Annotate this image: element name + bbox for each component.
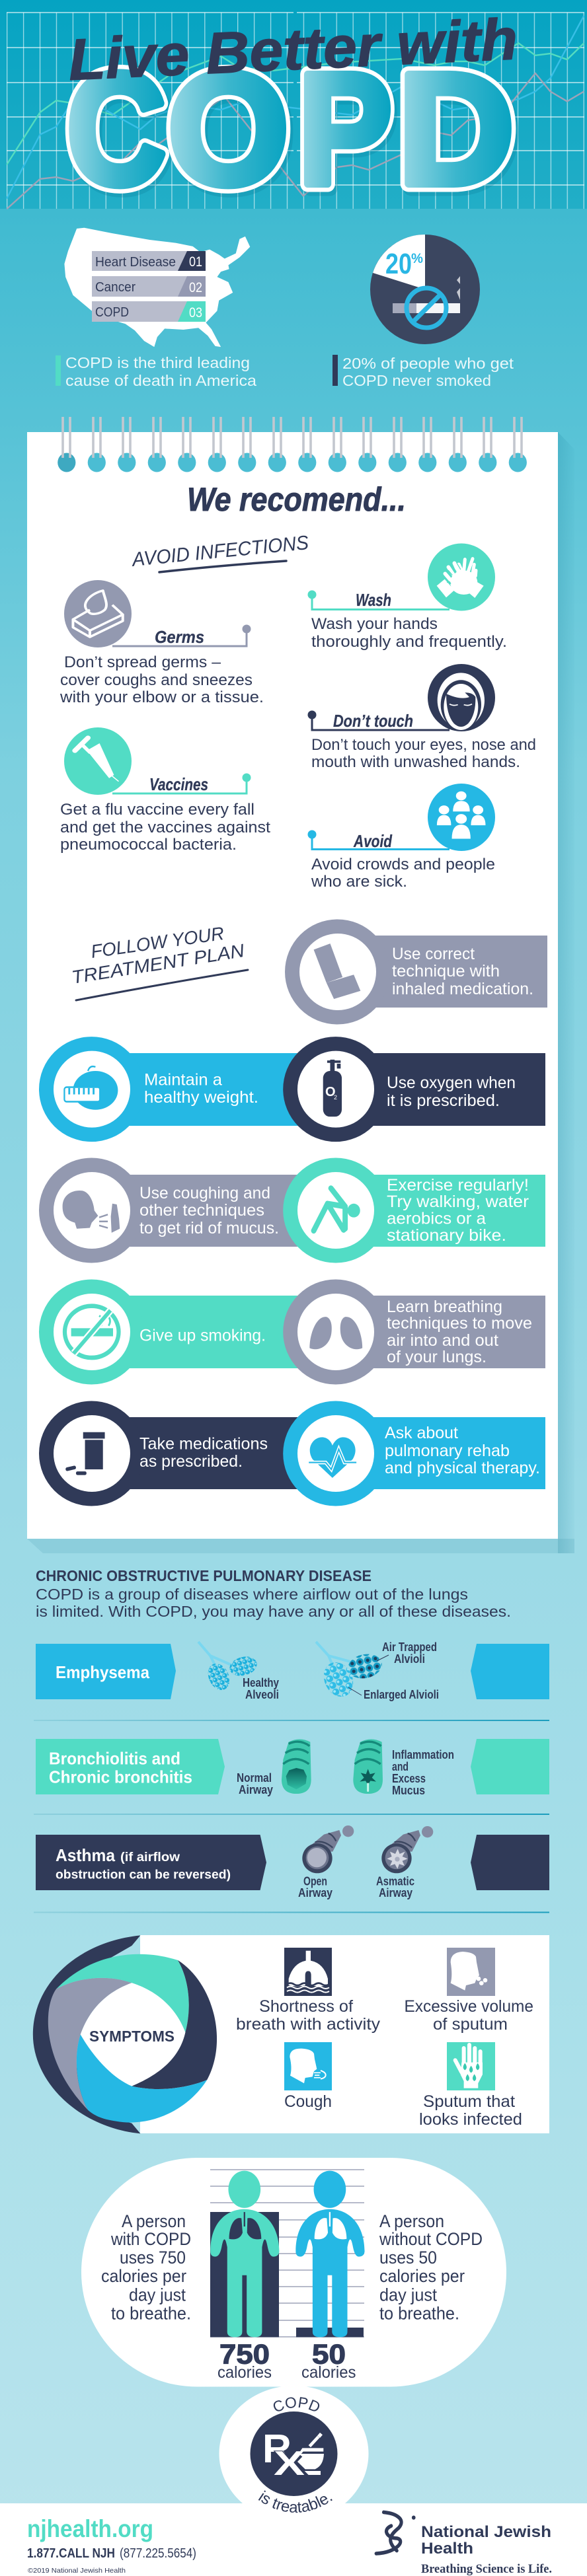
symptom: excessive sputum	[405, 1948, 533, 2034]
text: with COPD: day just	[129, 2285, 186, 2304]
value labels: calories	[301, 2363, 356, 2382]
icon: hands	[437, 559, 484, 598]
pill: coughing techniques	[39, 1158, 336, 1263]
icon: inhaler	[314, 943, 360, 999]
title: Live Better with: Live Better with	[67, 6, 519, 92]
panel: germs: cover coughs and sneezes	[60, 671, 253, 689]
symptom: shortness of breath: breath with activity	[236, 2015, 381, 2034]
footer contact	[27, 2515, 196, 2575]
pill: oxygen: it is prescribed.	[387, 1091, 500, 1110]
map panel: leading causes of death	[64, 228, 250, 347]
big COPD title: D	[398, 40, 514, 217]
panel: wash: Wash your hands	[311, 615, 438, 633]
caption: never smoked	[333, 355, 514, 389]
illustration: asthmatic airway: Asmatic	[376, 1874, 414, 1888]
pill: oxygen	[283, 1037, 545, 1142]
section intro: chronic obstructive pulmonary disease	[36, 1567, 511, 1620]
icon: helix	[376, 2512, 416, 2554]
pill: breathing techniques: techniques to move	[387, 1314, 532, 1333]
pill: pulmonary rehab: pulmonary rehab	[385, 1442, 510, 1460]
illustration: healthy alveoli	[198, 1642, 280, 1701]
symptom: excessive sputum: of sputum	[433, 2015, 508, 2034]
pill: pulmonary rehab: Ask about	[385, 1424, 458, 1442]
big COPD title: D	[398, 40, 514, 217]
caption: never smoked: COPD never smoked	[342, 372, 491, 389]
big COPD title	[67, 40, 517, 221]
figure: person without COPD	[295, 2171, 365, 2337]
pill: oxygen: O	[325, 1085, 336, 1099]
text: without COPD: calories per	[379, 2266, 465, 2286]
pill: exercise: aerobics or a	[387, 1209, 486, 1228]
text: with COPD: to breathe.	[111, 2304, 191, 2324]
big COPD title: C	[69, 44, 169, 221]
band: emphysema: Emphysema	[56, 1662, 149, 1682]
icon: coughing head	[63, 1191, 120, 1233]
icon: coughing head	[290, 2049, 326, 2083]
big COPD title: O	[171, 44, 292, 221]
symptom: infected sputum	[419, 2042, 522, 2129]
panel: notebook page	[27, 432, 558, 1539]
heading: We recomend: We recomend...	[187, 481, 406, 518]
icon: lungs and water	[287, 1951, 329, 1993]
rank 02 cancer: Cancer	[95, 280, 136, 295]
panel: don't touch: Don’t touch your eyes, nose and	[311, 736, 536, 754]
value labels: calories	[217, 2363, 272, 2382]
panel: symptoms band	[140, 1935, 549, 2133]
panel: wash: Wash	[356, 590, 391, 610]
badge: COPD is treatable: COPD	[274, 2397, 320, 2411]
footer contact: (877.225.5654)	[120, 2546, 196, 2561]
symptom: shortness of breath	[236, 1948, 381, 2034]
pill: exercise: Exercise regularly!	[387, 1176, 529, 1195]
value labels: 50	[312, 2339, 346, 2369]
icon: exercising figure	[314, 1189, 360, 1231]
logo: National Jewish Health: Health	[421, 2540, 473, 2558]
big COPD title: P	[301, 44, 395, 221]
pill: pulmonary rehab: and physical therapy.	[385, 1459, 540, 1477]
text: with COPD: uses 750	[120, 2248, 186, 2267]
logo: National Jewish Health: Breathing Science is Life.	[421, 2562, 552, 2576]
pill: oxygen: 2	[334, 1094, 337, 1101]
band: bronchitis: Bronchiolitis and	[49, 1749, 180, 1769]
icon: people	[437, 791, 485, 838]
pill: exercise: Try walking, water	[387, 1193, 529, 1211]
pill: healthy weight: healthy weight.	[144, 1088, 258, 1107]
text: without COPD: A person	[379, 2211, 444, 2231]
chart background: grid and trend lines	[7, 13, 584, 209]
illustration: open airway: Airway	[298, 1886, 333, 1899]
pill: healthy weight	[39, 1037, 336, 1142]
panel: vaccines: pneumococcal bacteria.	[60, 836, 237, 854]
pie chart: 20 percent never smoked: %	[411, 251, 423, 266]
footer contact: 1.877.CALL NJH	[27, 2546, 115, 2561]
text: with COPD: A person	[122, 2211, 186, 2231]
symptom: cough: Cough	[284, 2092, 332, 2111]
illustration: inflamed airway: Excess	[392, 1771, 426, 1785]
pill: inhaled medication: inhaled medication.	[392, 980, 533, 998]
value labels	[217, 2339, 356, 2382]
band: emphysema	[36, 1640, 549, 1701]
icon: lungs	[309, 1317, 362, 1349]
rank 01 heart disease: Heart Disease	[95, 255, 176, 270]
illustration: healthy alveoli: Alveoli	[245, 1687, 279, 1701]
big COPD title: P	[298, 40, 392, 217]
illustration: normal airway	[237, 1739, 311, 1796]
panel: avoid crowds	[308, 784, 495, 891]
icon: no smoking	[393, 276, 460, 328]
icon: Rx with mortar: X	[274, 2445, 305, 2483]
icon: syringe	[75, 738, 118, 781]
text: without COPD: uses 50	[379, 2248, 437, 2267]
illustration: inflamed airway: Mucus	[392, 1783, 425, 1797]
value labels: 750	[219, 2339, 270, 2369]
pill: breathing techniques: of your lungs.	[387, 1348, 487, 1366]
symptoms swirl: SYMPTOMS	[89, 2028, 175, 2045]
text: without COPD: day just	[379, 2285, 437, 2304]
panel: germs: Germs	[155, 627, 204, 647]
icon: hand with drops	[455, 2045, 483, 2088]
icon: oxygen tank	[323, 1060, 342, 1117]
section intro: chronic obstructive pulmonary disease: CHRONIC OBSTRUCTIVE PULMONARY DISEASE	[36, 1567, 372, 1584]
illustration: open airway: Open	[303, 1874, 327, 1888]
pill: inhaled medication	[285, 920, 547, 1024]
notebook shadow	[27, 432, 574, 1553]
pie chart: 20 percent never smoked: 20	[385, 248, 412, 280]
panel: germs	[59, 580, 264, 706]
divider	[34, 1814, 549, 1815]
illustration: inflamed airway: and	[392, 1759, 409, 1773]
panel: avoid crowds: Avoid	[353, 831, 393, 851]
footer band	[0, 2503, 587, 2576]
panel: avoid crowds: Avoid crowds and people	[311, 856, 495, 873]
pill: inhaled medication: Use correct	[392, 945, 475, 963]
icon: Rx with mortar	[262, 2426, 324, 2483]
symptom: excessive sputum: Excessive volume	[405, 1997, 533, 2016]
pill: breathing techniques	[283, 1279, 545, 1385]
rank 02 cancer: 02	[189, 280, 202, 295]
illustration: inflamed airway	[353, 1739, 454, 1797]
heading: follow your treatment plan: TREATMENT PLAN	[70, 940, 246, 988]
icon: tissue box	[73, 591, 123, 637]
icon: pill bottle	[65, 1432, 105, 1475]
big COPD title: D	[401, 44, 517, 221]
illustration: open airway	[298, 1825, 354, 1899]
section intro: chronic obstructive pulmonary disease: is limited. With COPD, you may have any or all of these diseases.	[36, 1603, 511, 1620]
figure: person with COPD	[210, 2171, 279, 2337]
rank 03 COPD	[92, 301, 206, 322]
symptom: cough	[284, 2042, 332, 2111]
panel: vaccines: Get a flu vaccine every fall	[60, 801, 254, 819]
caption: third leading cause	[56, 354, 256, 389]
band: asthma: Asthma	[56, 1845, 116, 1865]
illustration: inflamed airway: Inflammation	[392, 1748, 454, 1761]
panel: wash	[308, 543, 507, 651]
panel: don't touch: Don’t touch	[333, 711, 413, 731]
icon: Rx with mortar: R	[262, 2426, 292, 2471]
pill: give up smoking	[39, 1279, 336, 1385]
rank 03 COPD: 03	[189, 305, 202, 320]
pill: breathing techniques: Learn breathing	[387, 1298, 502, 1316]
badge: COPD is treatable: is treatable.	[258, 2490, 333, 2513]
panel: calories pill	[81, 2158, 506, 2386]
band: bronchitis	[36, 1739, 549, 1797]
big COPD title: O	[168, 40, 289, 217]
band: asthma: (if airflow	[120, 1851, 180, 1864]
footer contact: njhealth.org	[27, 2515, 153, 2542]
panel: vaccines: and get the vaccines against	[60, 819, 270, 836]
footer contact: ©2019 National Jewish Health	[28, 2567, 126, 2575]
pill: exercise	[283, 1158, 545, 1263]
icon: no smoking	[65, 1306, 119, 1358]
divider	[34, 1720, 549, 1721]
big COPD title: C	[67, 40, 166, 217]
chart: calories per day	[210, 2170, 365, 2382]
rank 03 COPD: COPD	[95, 305, 129, 320]
heading: follow your treatment plan	[70, 923, 248, 1000]
big COPD title: O	[168, 40, 289, 217]
pill: inhaled medication: technique with	[392, 962, 500, 980]
pie chart: 20 percent never smoked	[370, 235, 480, 344]
icon: heart with pulse	[309, 1437, 356, 1478]
pill: coughing techniques: other techniques	[139, 1201, 264, 1220]
panel: avoid crowds: who are sick.	[311, 873, 407, 891]
band: asthma	[36, 1825, 549, 1899]
icon: apple with tape	[64, 1066, 118, 1110]
symptom: infected sputum: looks infected	[419, 2110, 522, 2129]
spiral binding	[58, 417, 527, 472]
panel: vaccines	[60, 727, 270, 854]
panel: germs: with your elbow or a tissue.	[59, 688, 264, 706]
text: with COPD: with COPD	[110, 2229, 191, 2249]
rank 02 cancer	[92, 276, 206, 297]
pill: coughing techniques: Use coughing and	[139, 1184, 270, 1202]
heading: Avoid infections: AVOID INFECTIONS	[130, 532, 309, 571]
panel: don't touch	[308, 664, 536, 771]
text: with COPD: calories per	[101, 2266, 186, 2286]
badge: COPD is treatable	[219, 2386, 369, 2513]
symptoms swirl	[33, 1935, 217, 2133]
illustration: enlarged alveoli	[316, 1640, 439, 1701]
pill: take medications: Take medications	[139, 1435, 268, 1454]
text: without COPD: to breathe.	[379, 2304, 459, 2324]
panel: wash: thoroughly and frequently.	[311, 633, 507, 651]
symptom: shortness of breath: Shortness of	[259, 1997, 353, 2016]
divider	[34, 1912, 549, 1913]
band: bronchitis: Chronic bronchitis	[49, 1767, 192, 1786]
symptom: infected sputum: Sputum that	[423, 2092, 515, 2111]
caption: third leading cause: COPD is the third leading	[65, 354, 250, 371]
illustration: enlarged alveoli: Enlarged Alvioli	[364, 1687, 439, 1701]
text: without COPD	[379, 2211, 483, 2324]
pill: exercise: stationary bike.	[387, 1226, 506, 1245]
icon: US map	[64, 228, 250, 347]
icon: face	[438, 673, 485, 730]
pill: coughing techniques: to get rid of mucus.	[139, 1219, 279, 1237]
big COPD title: C	[67, 40, 166, 217]
rank 01 heart disease	[92, 251, 206, 271]
pill: take medications	[39, 1401, 336, 1506]
illustration: normal airway: Airway	[239, 1783, 274, 1796]
illustration: normal airway: Normal	[237, 1771, 272, 1785]
logo: National Jewish Health: National Jewish	[421, 2523, 551, 2541]
big COPD title: P	[298, 40, 392, 217]
illustration: asthmatic airway	[376, 1826, 433, 1899]
illustration: healthy alveoli: Healthy	[243, 1675, 280, 1689]
text: without COPD: without COPD	[379, 2229, 483, 2249]
rank 01 heart disease: 01	[189, 254, 202, 270]
caption: never smoked: 20% of people who get	[342, 355, 514, 372]
pill: take medications: as prescribed.	[139, 1452, 243, 1471]
pill: healthy weight: Maintain a	[144, 1070, 222, 1089]
pill: oxygen: Use oxygen when	[387, 1074, 516, 1092]
caption: third leading cause: cause of death in America	[65, 372, 256, 389]
pill: give up smoking: Give up smoking.	[139, 1327, 266, 1345]
illustration: enlarged alveoli: Air Trapped	[382, 1640, 437, 1654]
band: asthma: obstruction can be reversed)	[56, 1868, 231, 1882]
panel: vaccines: Vaccines	[149, 774, 208, 794]
heading: follow your treatment plan: FOLLOW YOUR	[90, 923, 225, 962]
logo: National Jewish Health	[376, 2512, 552, 2576]
text: with COPD	[101, 2211, 191, 2324]
pill: pulmonary rehab	[283, 1401, 545, 1506]
pill: breathing techniques: air into and out	[387, 1331, 498, 1350]
illustration: enlarged alveoli: Alvioli	[394, 1652, 425, 1666]
section intro: chronic obstructive pulmonary disease: COPD is a group of diseases where airflow out of the lungs	[36, 1586, 468, 1603]
icon: head with droplets	[451, 1952, 487, 1991]
panel: don't touch: mouth with unwashed hands.	[311, 753, 520, 771]
panel: germs: Don’t spread germs –	[64, 653, 221, 671]
illustration: asthmatic airway: Airway	[379, 1886, 413, 1899]
